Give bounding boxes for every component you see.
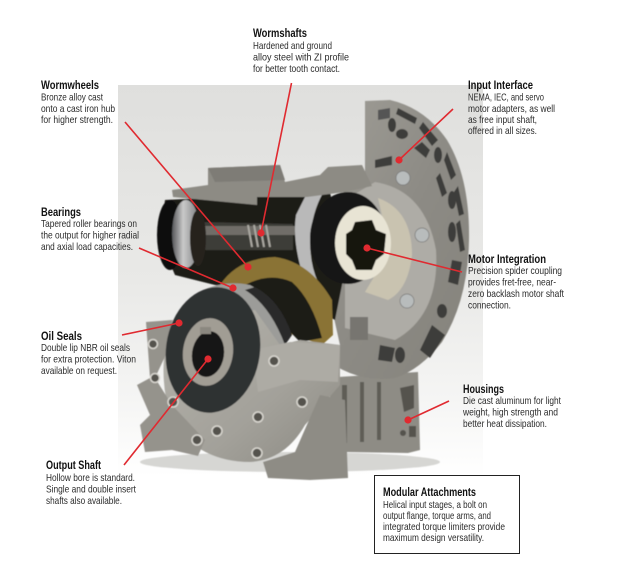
callout: wormshafts: Wormshafts [253, 28, 307, 40]
callout: wormwheels: Wormwheels [41, 80, 99, 92]
callout box: modular attachments [374, 476, 520, 554]
callout: housings: better heat dissipation. [463, 419, 547, 430]
callout: motor integration: Precision spider coupling [468, 266, 562, 277]
callout: housings: Die cast aluminum for light [463, 396, 561, 407]
input flange disc [320, 100, 469, 379]
callout: motor integration: Motor Integration [468, 254, 546, 266]
top casting [172, 165, 372, 205]
callout box: modular attachments: maximum design versatility. [383, 533, 484, 544]
worm thread [248, 225, 270, 247]
callout: motor integration: connection. [468, 300, 511, 312]
top block of housing [253, 342, 340, 392]
housing mount holes [400, 385, 416, 437]
left bearing [157, 200, 183, 270]
left foot [137, 320, 205, 456]
callout box: modular attachments: output flange, torque arms, and [383, 511, 491, 522]
callout: wormwheels: Bronze alloy cast [41, 92, 103, 104]
right foot [263, 395, 348, 480]
screws [148, 340, 307, 458]
flange holes [350, 108, 465, 363]
callout: input interface [468, 80, 555, 137]
flange inner face [345, 182, 436, 340]
leader: output shaft [124, 355, 212, 465]
callout: bearings [41, 207, 139, 253]
callout: input interface: Input Interface [468, 80, 533, 92]
leader: oil seals [122, 319, 183, 335]
callout: input interface: offered in all sizes. [468, 126, 537, 137]
spider coupling [335, 206, 391, 280]
callout: bearings: the output for higher radial [41, 230, 139, 242]
callout: motor integration: zero backlash motor shaft [468, 289, 564, 300]
photo: gearbox cutaway [118, 85, 483, 480]
callout: bearings: and axial load capacities. [41, 242, 133, 253]
callout: input interface: as free input shaft, [468, 115, 537, 126]
callout: oil seals: Double lip NBR oil seals [41, 343, 130, 354]
callout: wormshafts: for better tooth contact. [253, 64, 340, 75]
red leader lines [122, 83, 462, 465]
callout: bearings: Bearings [41, 207, 81, 219]
output bearing [188, 283, 290, 370]
callout: housings [462, 384, 561, 430]
callout: output shaft: Single and double insert [46, 484, 136, 496]
wormshaft [200, 222, 293, 250]
leader: housings [404, 401, 449, 424]
front housing [164, 310, 340, 462]
callout: housings: weight, high strength and [462, 408, 558, 418]
callout: oil seals: available on request. [41, 366, 117, 377]
leader: input interface [395, 109, 453, 164]
callout: output shaft: shafts also available. [46, 496, 122, 507]
leader: wormwheels [125, 122, 252, 271]
callout: output shaft [46, 460, 136, 507]
callout: oil seals: for extra protection. Viton [41, 354, 136, 366]
callout: output shaft: Output Shaft [46, 460, 101, 472]
shadow [140, 452, 440, 472]
callout: oil seals: Oil Seals [41, 331, 82, 343]
callout box: modular attachments: Modular Attachments [383, 487, 476, 499]
callout: wormshafts [253, 28, 349, 75]
base block with fins [330, 372, 420, 453]
callout: oil seals [41, 331, 136, 377]
callout: wormwheels [41, 80, 115, 126]
callout box: modular attachments: integrated torque limiters provide [383, 522, 505, 533]
callout: wormwheels: for higher strength. [41, 115, 113, 126]
bore into flange [365, 198, 412, 300]
oil seal [158, 281, 268, 419]
callout: input interface: motor adapters, as well [468, 104, 555, 115]
leader: motor integration [363, 244, 462, 272]
spider coupling slot [346, 220, 386, 270]
callout: motor integration: provides fret-free, near- [468, 278, 556, 288]
black seal [310, 192, 386, 284]
right bearing ring [295, 193, 323, 282]
callout: housings: Housings [463, 384, 504, 396]
callout: wormwheels: onto a cast iron hub [41, 104, 115, 115]
callout: input interface: NEMA, IEC, and servo [468, 92, 544, 104]
callout: output shaft: Hollow bore is standard. [46, 473, 135, 484]
hollow output hub [179, 315, 237, 389]
photo background [118, 85, 483, 477]
cooling fins [342, 382, 381, 443]
callout: wormshafts: alloy steel with ZI profile [253, 52, 349, 64]
output bore [189, 329, 227, 379]
callout: wormshafts: Hardened and ground [253, 41, 332, 52]
leader: bearings [139, 248, 237, 292]
internal cavity [160, 192, 345, 320]
callout: bearings: Tapered roller bearings on [41, 219, 137, 230]
gearbox drawing [137, 100, 469, 480]
leader: wormshafts [257, 83, 292, 237]
callout: motor integration [468, 254, 564, 312]
flange bolts [396, 171, 429, 308]
callout box: modular attachments: Helical input stages, a bolt on [383, 500, 487, 511]
gear wheel [220, 257, 333, 345]
